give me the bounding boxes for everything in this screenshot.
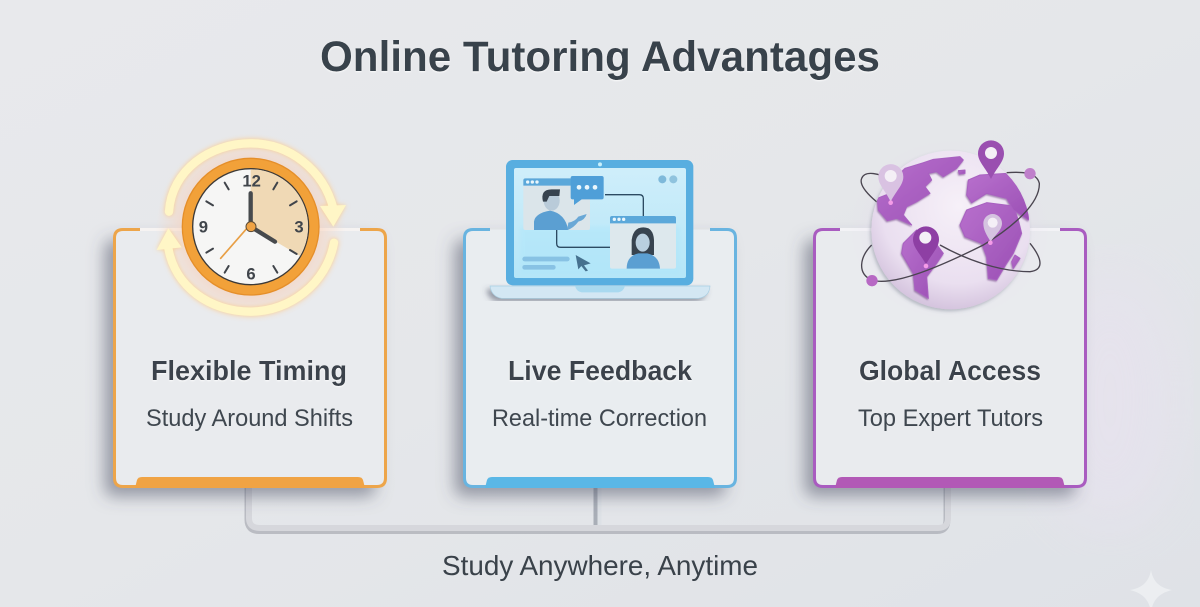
icon: circular arrows <box>157 143 346 312</box>
panel: live feedback <box>464 230 736 488</box>
panel: flexible timing <box>114 230 386 488</box>
panel: global access <box>814 230 1086 488</box>
heading: live feedback: Live Feedback <box>508 355 692 386</box>
accent bar: purple <box>835 477 1065 488</box>
connector: bracket linking the three cards <box>248 486 948 530</box>
numerals: 6 <box>246 265 256 284</box>
numerals: 3 <box>294 218 304 237</box>
accent bar: orange <box>135 477 365 488</box>
speech bubble <box>571 176 604 205</box>
cursor <box>576 255 591 271</box>
numerals <box>199 171 304 284</box>
video window: tutor <box>523 178 590 230</box>
laptop lid <box>506 160 693 285</box>
shaded sector <box>251 169 308 256</box>
heading: flexible timing: Flexible Timing <box>151 355 347 386</box>
pin: north america <box>878 164 903 205</box>
text: real-time correction: Real-time Correction <box>492 405 707 432</box>
laptop screen <box>514 168 686 278</box>
icon: globe with location pins <box>860 140 1041 313</box>
pin: south america <box>913 226 939 268</box>
pin: europe <box>978 140 1004 179</box>
laptop base <box>490 286 710 298</box>
continents <box>877 157 1032 298</box>
video window: student <box>610 216 676 269</box>
globe sphere <box>871 151 1030 309</box>
orbit beads <box>1024 168 1036 179</box>
icon: laptop with video call <box>490 160 710 300</box>
clock body <box>182 158 319 295</box>
numerals: 9 <box>199 218 208 237</box>
numerals: 12 <box>242 171 261 190</box>
hour ticks <box>206 183 297 273</box>
text: top expert tutors: Top Expert Tutors <box>858 405 1043 432</box>
clock hands <box>221 227 248 258</box>
text lines <box>522 257 570 261</box>
title: Online Tutoring Advantages <box>320 33 880 81</box>
caption: Study Anywhere, Anytime <box>442 550 758 581</box>
pin: africa <box>983 214 1002 245</box>
icon: clock with circular arrows <box>156 133 346 323</box>
heading: global access: Global Access <box>859 355 1041 386</box>
link lines <box>605 195 643 217</box>
text: study around shifts: Study Around Shifts <box>146 405 353 432</box>
orbit rings behind globe <box>861 173 910 280</box>
icon: sparkle watermark <box>1130 570 1172 607</box>
orbit rings in front <box>872 172 1040 281</box>
accent bar: blue <box>485 477 715 488</box>
